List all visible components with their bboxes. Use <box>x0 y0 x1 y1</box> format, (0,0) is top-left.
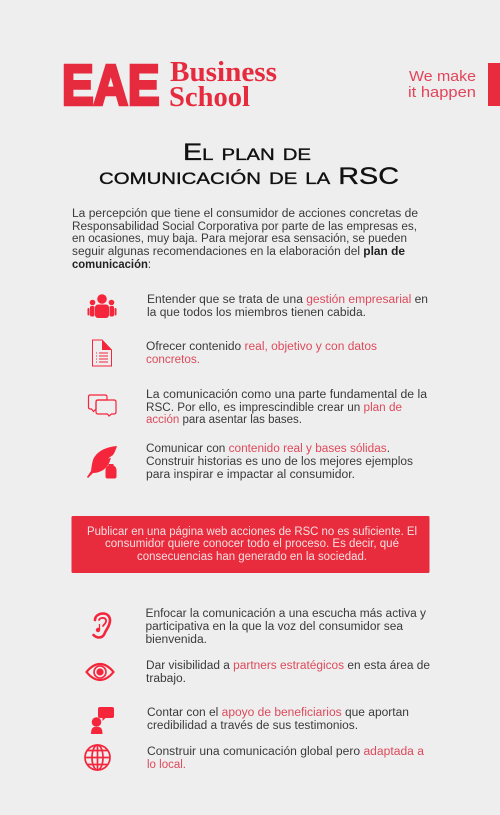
callout banner <box>72 516 430 573</box>
title: El plan de <box>183 139 311 166</box>
icon: people <box>88 294 116 318</box>
text: global y local <box>147 746 425 771</box>
tagline: We make it happen: We make <box>409 68 476 85</box>
text: contenido real: Construir historias es uno de los mejores ejemplos <box>146 456 413 468</box>
intro paragraph: Responsabilidad Social Corporativa por parte de las empresas es, <box>72 221 417 233</box>
logo: EAE Business School: Business <box>170 57 277 88</box>
text: escucha activa: Enfocar la comunicación a una escucha más activa y <box>146 608 426 620</box>
title <box>99 139 399 190</box>
text: partners <box>146 660 430 685</box>
text: real, objetivo: concretos. <box>146 354 200 366</box>
icon: ear <box>94 614 110 638</box>
text: contenido real: para inspirar e impactar al consumidor. <box>146 469 355 481</box>
text: real, objetivo <box>146 341 377 366</box>
text: gestión empresarial: la que todos los miembros tienen cabida. <box>147 307 366 319</box>
text: global y local: Construir una comunicación global pero adaptada a <box>147 746 425 758</box>
logo: EAE Business School: EAE <box>62 54 160 118</box>
intro paragraph: seguir algunas recomendaciones en la elaboración del plan de <box>72 246 405 258</box>
red tab <box>488 63 500 106</box>
icon: globe <box>85 745 110 770</box>
intro paragraph: La percepción que tiene el consumidor de acciones concretas de <box>72 208 418 220</box>
text: gestión empresarial <box>147 294 428 319</box>
text: plan de acción <box>146 389 428 426</box>
icon: person with speech bubble <box>91 707 114 734</box>
text: plan de acción: La comunicación como una parte fundamental de la <box>146 389 428 401</box>
text: escucha activa: bienvenida. <box>146 634 207 646</box>
callout banner: consumidor quiere conocer todo el proceso. Es decir, qué <box>105 538 399 550</box>
text: partners: Dar visibilidad a partners estratégicos en esta área de <box>146 660 430 672</box>
icon: chat bubbles <box>88 395 116 416</box>
text: beneficiarios: Contar con el apoyo de beneficiarios que aportan <box>147 707 409 719</box>
logo: EAE Business School <box>62 54 277 118</box>
icon: feather and ink <box>87 446 117 478</box>
text: global y local: lo local. <box>147 759 186 771</box>
logo: EAE Business School: School <box>169 82 250 113</box>
intro paragraph: comunicación: <box>72 259 151 271</box>
text: plan de acción: acción para asentar las bases. <box>146 414 302 426</box>
text: contenido real <box>146 443 413 481</box>
intro paragraph: en ocasiones, muy baja. Para mejorar esa sensación, se pueden <box>72 233 407 245</box>
icon: eye <box>86 664 114 680</box>
tagline: We make it happen <box>408 68 476 101</box>
title: comunicación de la RSC <box>99 163 399 190</box>
text: plan de acción: RSC. Por ello, es imprescindible crear un plan de <box>146 402 402 414</box>
text: escucha activa <box>146 608 426 646</box>
text: partners: trabajo. <box>146 673 186 685</box>
text: beneficiarios: credibilidad a través de sus testimonios. <box>147 720 358 732</box>
text: contenido real: Comunicar con contenido real y bases sólidas . <box>146 443 390 455</box>
tagline: We make it happen: it happen <box>408 84 476 101</box>
text: real, objetivo: Ofrecer contenido real, objetivo y con datos <box>146 341 377 353</box>
icon: document <box>92 340 112 366</box>
text: beneficiarios <box>147 707 409 732</box>
text: escucha activa: participativa en la que la voz del consumidor sea <box>146 621 404 633</box>
callout banner: Publicar en una página web acciones de RSC no es suficiente. El <box>87 526 417 538</box>
intro paragraph <box>72 208 418 271</box>
callout banner: consecuencias han generado en la sociedad. <box>137 551 367 563</box>
text: gestión empresarial: Entender que se trata de una gestión empresarial en <box>147 294 428 306</box>
